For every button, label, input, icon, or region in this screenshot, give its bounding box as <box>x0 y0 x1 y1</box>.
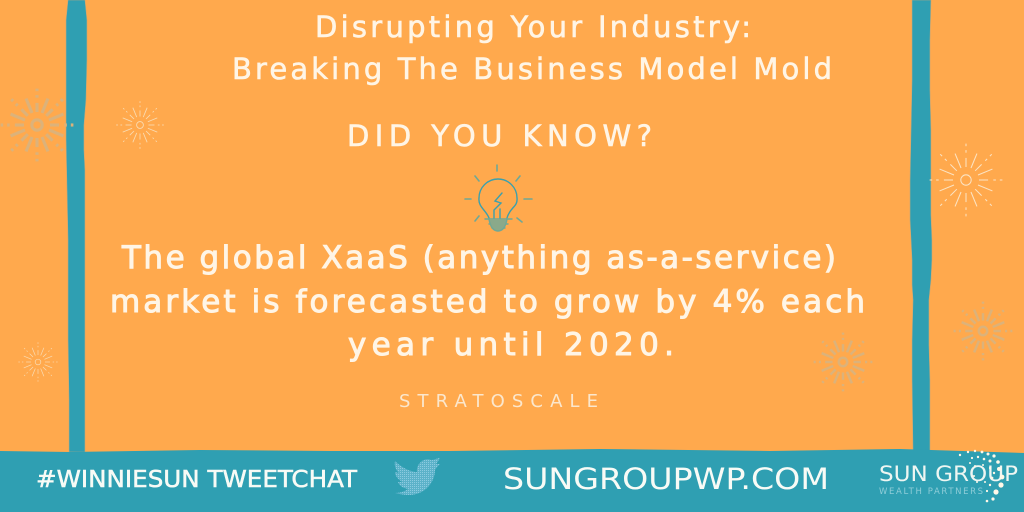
logo name: SUN GROUP <box>879 462 1018 486</box>
website: SUNGROUPWP.COM <box>503 462 829 496</box>
burst: cream left <box>116 101 164 149</box>
hashtag: #WINNIESUN TWEETCHAT <box>36 467 358 493</box>
main statement: The global XaaS (anything as-a-service) <box>121 240 836 276</box>
burst: top left faded <box>1 89 73 161</box>
burst: centre lower faded <box>814 333 872 391</box>
burst: right cream <box>930 144 1002 216</box>
heading: did you know: DID YOU KNOW? <box>347 119 652 153</box>
right vertical stripe <box>910 0 932 452</box>
logo <box>879 450 1018 502</box>
icon: twitter bird <box>395 458 440 495</box>
logo dots <box>959 450 1004 502</box>
burst: right lower faded <box>954 302 1012 360</box>
title <box>232 10 832 86</box>
bottom band <box>0 449 1024 512</box>
main statement: year until 2020. <box>348 327 674 363</box>
icon: light bulb <box>465 165 532 231</box>
title: Disrupting Your Industry: <box>315 10 751 44</box>
main statement <box>110 240 865 363</box>
logo tagline: WEALTH PARTNERS <box>879 487 983 497</box>
burst: lower left cream <box>18 342 58 382</box>
title: Breaking The Business Model Mold <box>232 52 832 86</box>
left vertical stripe <box>66 0 87 452</box>
main statement: market is forecasted to grow by 4% each <box>110 284 865 320</box>
source: STRATOSCALE <box>399 391 598 412</box>
